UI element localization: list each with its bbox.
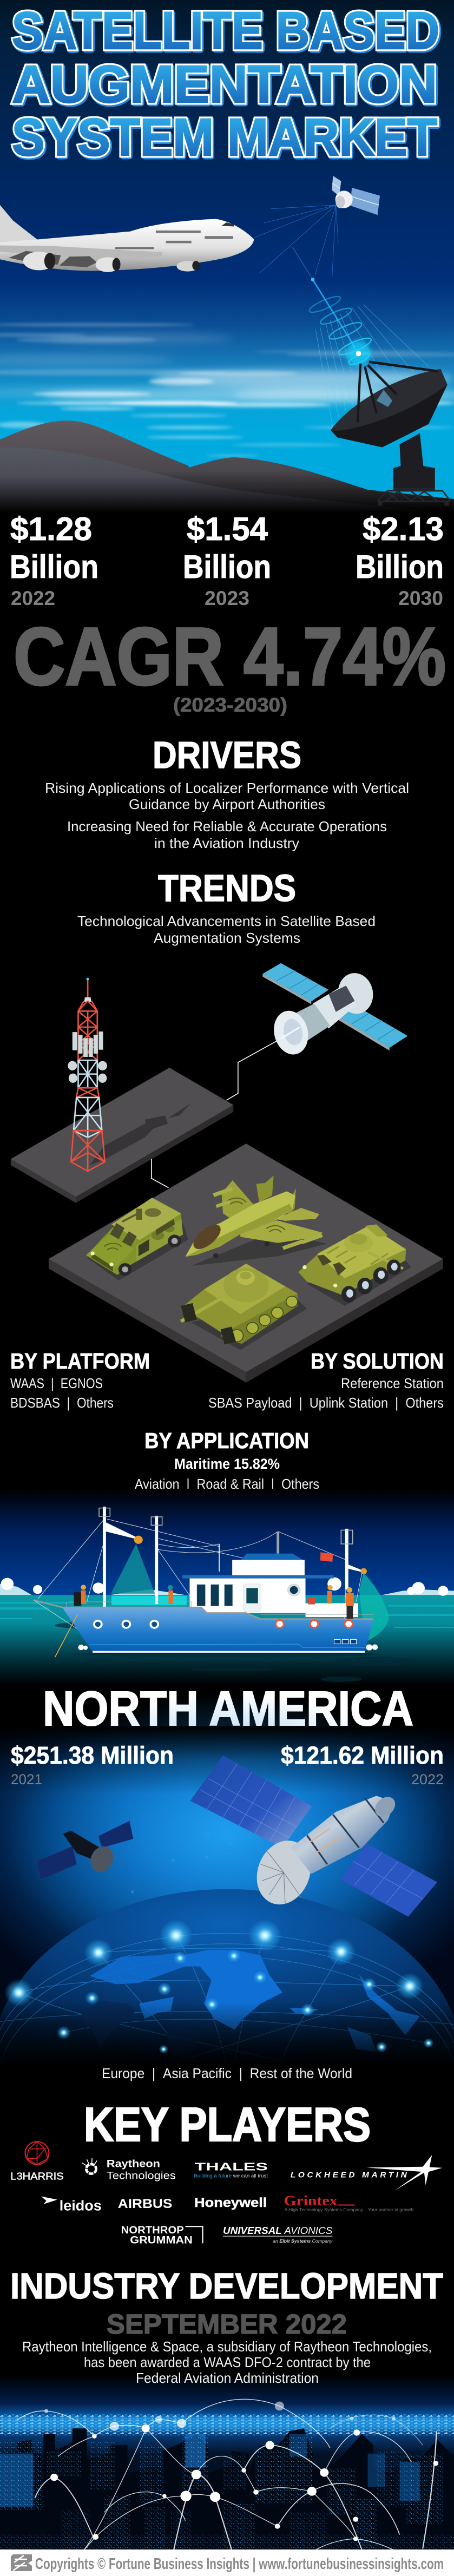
trends text: Technological Advancements in Satellite Based	[77, 913, 376, 929]
city backdrop	[0, 2375, 454, 2550]
by platform segment: BDSBAS | Others	[10, 1395, 114, 1411]
building glow	[0, 2434, 420, 2507]
isometric illustration: tower, satellite, vehicles	[11, 963, 443, 1383]
industry development text: Raytheon Intelligence & Space, a subsidiary of Raytheon Technologies,	[22, 2338, 432, 2355]
logo: Thales: Building a future we can all trust	[194, 2173, 268, 2178]
other regions: Europe | Asia Pacific | Rest of the World	[102, 2065, 352, 2081]
development date: SEPTEMBER 2022	[107, 2309, 347, 2340]
drivers text: Increasing Need for Reliable & Accurate Operations	[67, 818, 387, 834]
footer bar	[0, 2549, 454, 2576]
by platform segment	[10, 1349, 150, 1411]
cabin	[182, 1552, 358, 1617]
logo: Grintex: Grintex	[284, 2192, 338, 2209]
logo: Grintex: A High Technology Systems Company... Your partner in growth	[284, 2207, 413, 2212]
north america 2021 figure	[11, 1742, 174, 1788]
by application segment: Maritime 15.82%	[174, 1456, 280, 1472]
by solution segment	[208, 1349, 444, 1411]
icon: relay satellite	[262, 963, 407, 1057]
stat: 2022 value: Billion	[10, 549, 98, 585]
trends text	[77, 913, 376, 946]
title line 2: AUGMENTATION	[12, 55, 437, 114]
north america 2022 figure: $121.62 Million	[281, 1742, 444, 1769]
logo: Raytheon Technologies: Technologies	[107, 2170, 176, 2181]
logo: Honeywell: Honeywell	[194, 2196, 267, 2210]
title line 2: AUGMENTATION	[12, 55, 437, 114]
logo: Thales	[194, 2161, 268, 2178]
logo: Raytheon Technologies: Raytheon	[107, 2158, 160, 2170]
night city network illustration	[0, 2375, 454, 2550]
by platform segment: WAAS | EGNOS	[10, 1375, 103, 1391]
industry development text: has been awarded a WAAS DFO-2 contract by the	[84, 2354, 371, 2370]
north america 2021 figure: 2021	[11, 1771, 42, 1788]
logo: Universal Avionics	[223, 2226, 333, 2244]
industry development text: Federal Aviation Administration	[136, 2370, 319, 2386]
icon: amphibious APC	[298, 1225, 411, 1306]
logo: Thales: THALES	[195, 2161, 268, 2173]
by application segment: Aviation | Road & Rail | Others	[135, 1476, 319, 1492]
icon: large satellite	[190, 1755, 437, 1917]
icon: Fortune Business Insights logo	[11, 2554, 32, 2571]
network nodes	[44, 2402, 438, 2541]
icon: battle tank	[181, 1264, 307, 1350]
north america 2022 figure: 2022	[411, 1771, 444, 1788]
vehicle platform	[49, 1144, 443, 1383]
logo: Universal Avionics: UNIVERSAL AVIONICS	[223, 2226, 333, 2237]
logo: L3Harris	[10, 2141, 64, 2182]
hull	[34, 1600, 378, 1657]
logo: Leidos	[41, 2196, 102, 2213]
logo: Lockheed Martin	[291, 2155, 443, 2191]
by platform segment: BY PLATFORM	[10, 1349, 150, 1374]
tower platform	[11, 1068, 233, 1203]
signal beams	[254, 205, 429, 429]
logo: Raytheon Technologies	[82, 2158, 176, 2181]
by solution segment: Reference Station	[341, 1375, 444, 1391]
north america 2021 figure: $251.38 Million	[11, 1742, 174, 1769]
mountains	[0, 420, 454, 517]
logo: Northrop Grumman: GRUMMAN	[130, 2235, 193, 2246]
work lights	[111, 1544, 389, 1642]
key player logos	[10, 2141, 443, 2246]
stat: 2022 value: 2022	[11, 587, 55, 609]
title line 2: AUGMENTATION	[13, 56, 438, 115]
icon: armoured jeep	[86, 1198, 188, 1280]
by application segment	[135, 1428, 319, 1492]
trends heading: TRENDS	[158, 867, 296, 909]
glow nodes	[4, 1920, 434, 2054]
stat: 2023 value: Billion	[183, 549, 271, 585]
key players heading: KEY PLAYERS	[84, 2098, 371, 2151]
icon: satellite dish	[331, 362, 450, 505]
CAGR period: (2023-2030)	[173, 694, 287, 716]
north america heading: NORTH AMERICA	[43, 1682, 413, 1736]
drivers text	[45, 780, 409, 851]
icon: small satellite	[332, 176, 380, 215]
icon: fighter jet	[185, 1175, 327, 1266]
logo: Lockheed Martin: LOCKHEED MARTIN	[291, 2171, 407, 2179]
rigging	[34, 1519, 362, 1629]
crew	[74, 1585, 354, 1619]
industry development text	[22, 2338, 432, 2386]
trends text: Augmentation Systems	[154, 930, 300, 946]
icon: small satellite	[36, 1821, 133, 1880]
logo: Leidos: leidos	[60, 2198, 102, 2213]
hero illustration: sky, plane, satellite, dish	[0, 0, 454, 517]
sky and sea	[0, 1489, 454, 1690]
drivers heading: DRIVERS	[153, 734, 301, 776]
title line 3: SYSTEM MARKET	[12, 108, 437, 167]
network arcs	[17, 2399, 437, 2550]
icon: communication tower	[68, 978, 107, 1171]
stat: 2030 value: 2030	[398, 587, 443, 609]
logo: Northrop Grumman: NORTHROP	[121, 2224, 184, 2236]
logo: Universal Avionics: an Elbit Systems Company	[273, 2238, 333, 2244]
title line 3: SYSTEM MARKET	[12, 108, 437, 167]
logo: Grintex	[284, 2192, 413, 2212]
globe and satellites illustration	[0, 1693, 454, 2066]
logo: Airbus: AIRBUS	[118, 2197, 172, 2211]
stat: 2030 value: Billion	[356, 549, 444, 585]
stat: 2022 value: $1.28	[10, 511, 92, 547]
stat: 2030 value: $2.13	[363, 511, 444, 547]
masts	[99, 1507, 367, 1607]
north america 2022 figure	[281, 1742, 444, 1788]
clouds	[0, 323, 454, 457]
title	[12, 1, 440, 168]
stat: 2023 value: $1.54	[187, 511, 268, 547]
icon: airplane	[0, 205, 254, 272]
drivers text: Guidance by Airport Authorities	[129, 796, 325, 812]
drivers text: Rising Applications of Localizer Performance with Vertical	[45, 780, 409, 796]
water reflections	[55, 1622, 417, 1682]
skyline	[0, 2428, 454, 2550]
sky	[0, 0, 454, 517]
space backdrop	[0, 1693, 454, 2066]
logo: L3Harris: L3HARRIS	[10, 2171, 64, 2182]
globe	[0, 1889, 454, 2066]
stat: 2022 value	[10, 511, 98, 609]
stat: 2023 value: 2023	[205, 587, 249, 609]
maritime illustration: ship at sea	[0, 1489, 454, 1690]
stat: 2030 value	[356, 511, 444, 609]
icebergs on the horizon	[0, 1578, 454, 1596]
stat: 2023 value	[183, 511, 271, 609]
drivers text: in the Aviation Industry	[154, 835, 299, 851]
logo: Northrop Grumman	[121, 2224, 203, 2246]
black fade at globe base	[0, 2002, 454, 2066]
window lights	[0, 2434, 454, 2550]
connector lines	[152, 1040, 279, 1188]
by application segment: BY APPLICATION	[144, 1428, 309, 1453]
